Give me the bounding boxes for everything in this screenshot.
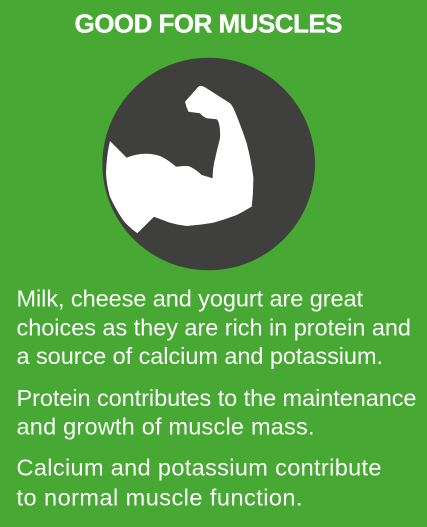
text block: dairy choices: a source of calcium and potassium.	[16, 343, 383, 369]
text block: protein	[16, 385, 416, 439]
text block: dairy choices: choices as they are rich in protein and	[16, 315, 411, 341]
icon: flexed arm in circle	[102, 58, 315, 270]
text block: protein: and growth of muscle mass.	[16, 413, 314, 439]
text block: dairy choices: Milk, cheese and yogurt are great	[16, 286, 363, 312]
text block: calcium and potassium	[16, 455, 382, 510]
icon background circle	[102, 58, 315, 270]
text block: protein: Protein contributes to the maintenance	[16, 385, 416, 411]
title: GOOD FOR MUSCLES	[74, 9, 342, 39]
text block: dairy choices	[16, 286, 411, 369]
flexed arm silhouette	[106, 86, 253, 233]
text block: calcium and potassium: to normal muscle function.	[16, 484, 302, 510]
text block: calcium and potassium: Calcium and potassium contribute	[16, 455, 382, 481]
